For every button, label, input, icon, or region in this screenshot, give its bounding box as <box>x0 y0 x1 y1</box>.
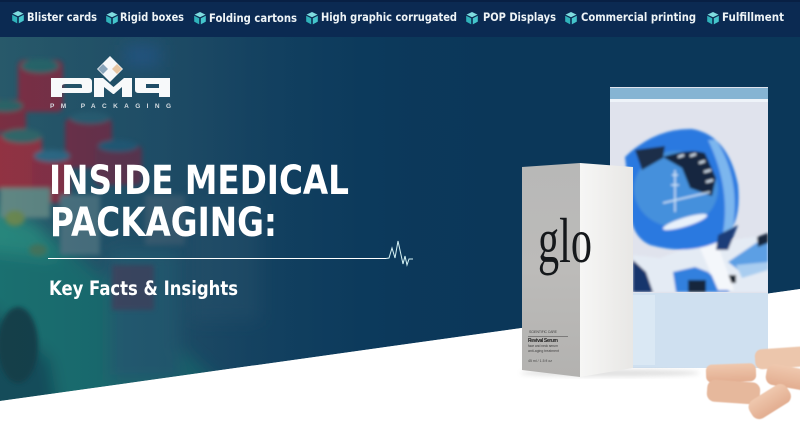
nav item: fulfillment: Fulfillment <box>722 10 784 24</box>
title: INSIDE MEDICAL <box>49 158 349 204</box>
divider with heartbeat line <box>48 241 413 265</box>
top navigation bar <box>0 0 800 37</box>
box small label: Revival Serum <box>528 338 559 344</box>
logo wordmark: PM PACKAGING <box>50 103 171 110</box>
booklet: blood pressure gauge <box>610 87 768 368</box>
box small label: 45 ml / 1.5 fl oz <box>528 359 552 363</box>
dial face <box>634 151 718 227</box>
cap shapes <box>18 60 63 112</box>
pill: bottom <box>746 381 794 422</box>
nav item: blister cards: Blister cards <box>27 10 97 24</box>
white wedge <box>0 289 800 434</box>
box shadow <box>520 370 700 376</box>
nav item: pop displays: POP Displays <box>483 10 556 24</box>
box small label: face and neck serum <box>528 344 558 348</box>
logo: PM Packaging <box>50 56 171 110</box>
pill: front <box>706 379 761 405</box>
pills <box>706 346 800 422</box>
highlight <box>662 211 708 233</box>
nav item: commercial printing: Commercial printing <box>581 10 696 24</box>
title: PACKAGING: <box>50 200 277 246</box>
outer ring <box>625 129 739 249</box>
gauge image <box>625 129 768 292</box>
pill: right <box>764 363 800 394</box>
box small label <box>528 330 568 363</box>
pill: back right <box>754 346 800 370</box>
glo wordmark: glo <box>538 205 592 276</box>
nav item: high graphic corrugated: High graphic corrugated <box>321 10 457 24</box>
nav item: folding cartons: Folding cartons <box>209 11 297 25</box>
product box: glo <box>522 163 633 377</box>
pill: top <box>706 363 756 383</box>
box small label: SCIENTIFIC CARE <box>529 330 558 334</box>
tube and fittings <box>633 235 768 292</box>
nav item: rigid boxes: Rigid boxes <box>120 10 184 24</box>
box small label: anti-aging treatment <box>528 349 559 353</box>
lower panel <box>632 293 768 368</box>
subtitle: Key Facts & Insights <box>49 277 238 300</box>
logo letters PMP <box>51 78 170 97</box>
icon: logo diamond <box>97 56 123 82</box>
